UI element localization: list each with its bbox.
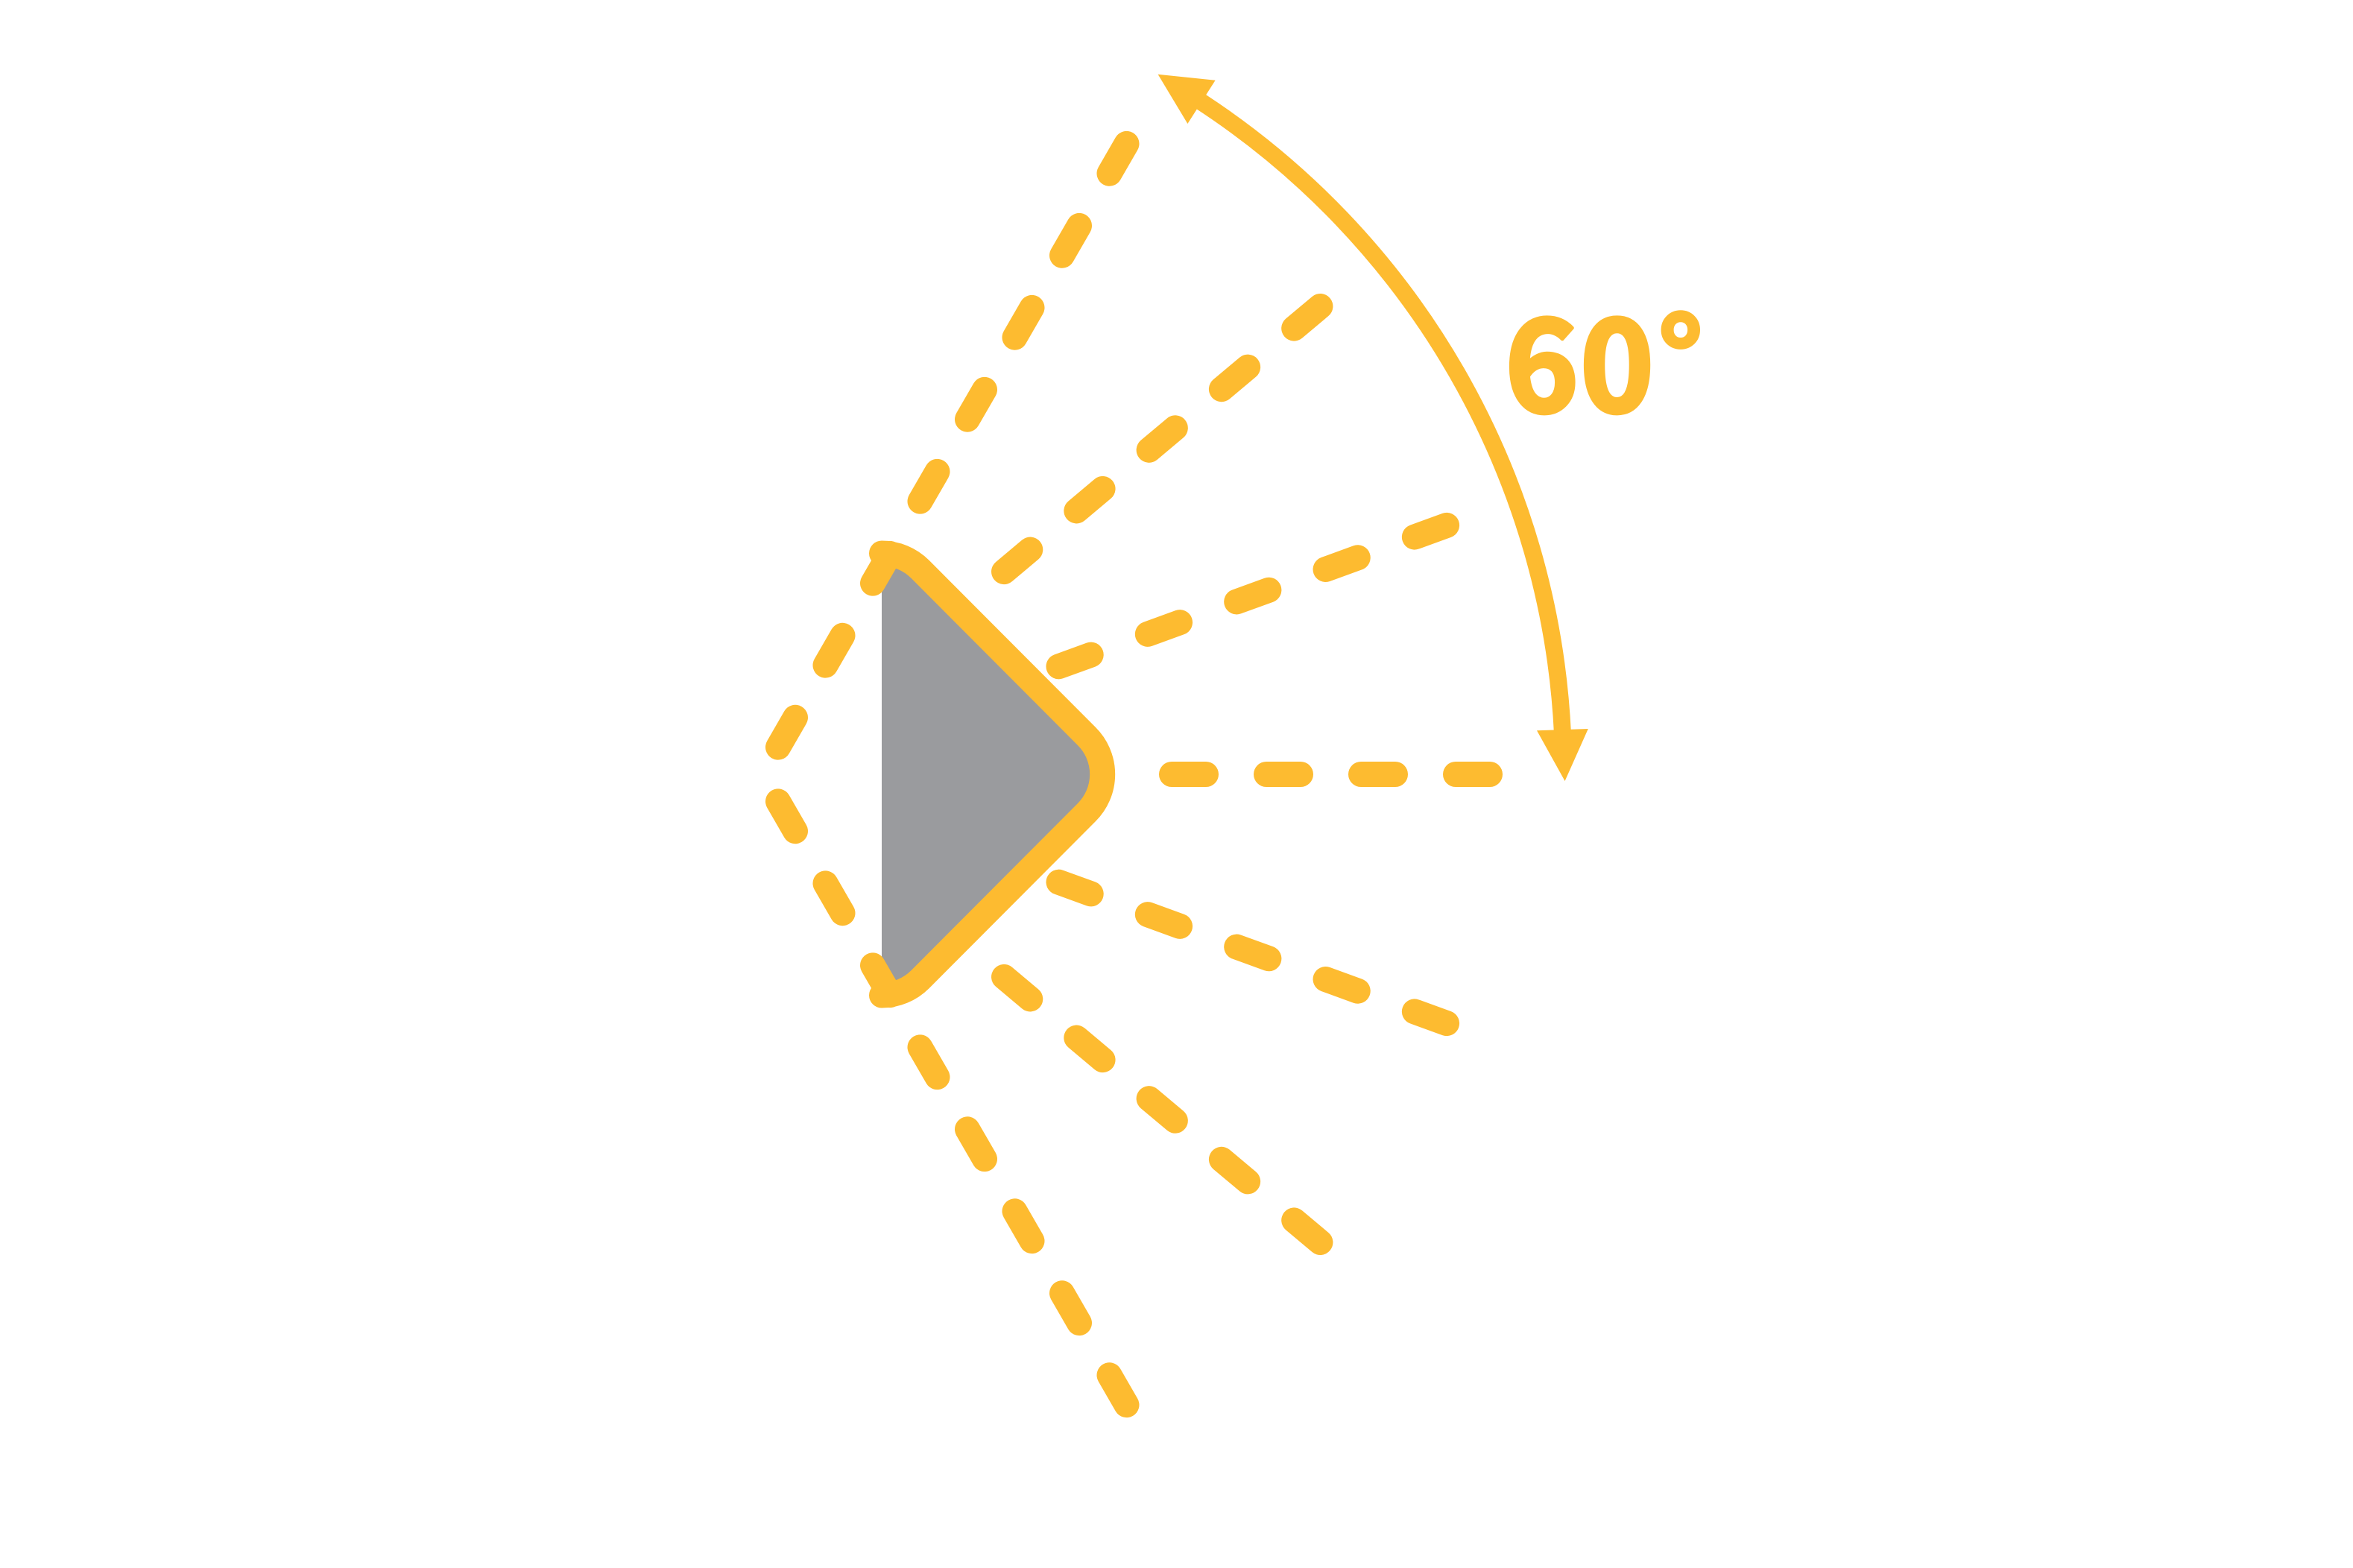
ray: -20 degrees	[1058, 882, 1447, 1023]
ray: +40 degrees	[1004, 306, 1320, 572]
ray: +60 degrees	[778, 144, 1127, 747]
angle label: 6	[1505, 267, 1579, 449]
ray: -40 degrees	[1004, 977, 1320, 1242]
angle label: 0	[1580, 267, 1654, 449]
angle label: °	[1658, 270, 1703, 432]
dashed rays fan	[778, 144, 1490, 1405]
arrow: angle arc from horizontal to 60 degrees	[1158, 75, 1588, 781]
icon: rounded triangle source	[882, 553, 1102, 996]
ray: 0 degrees	[1172, 762, 1490, 787]
ray: +20 degrees	[1058, 525, 1447, 666]
ray: -60 degrees	[778, 801, 1127, 1405]
